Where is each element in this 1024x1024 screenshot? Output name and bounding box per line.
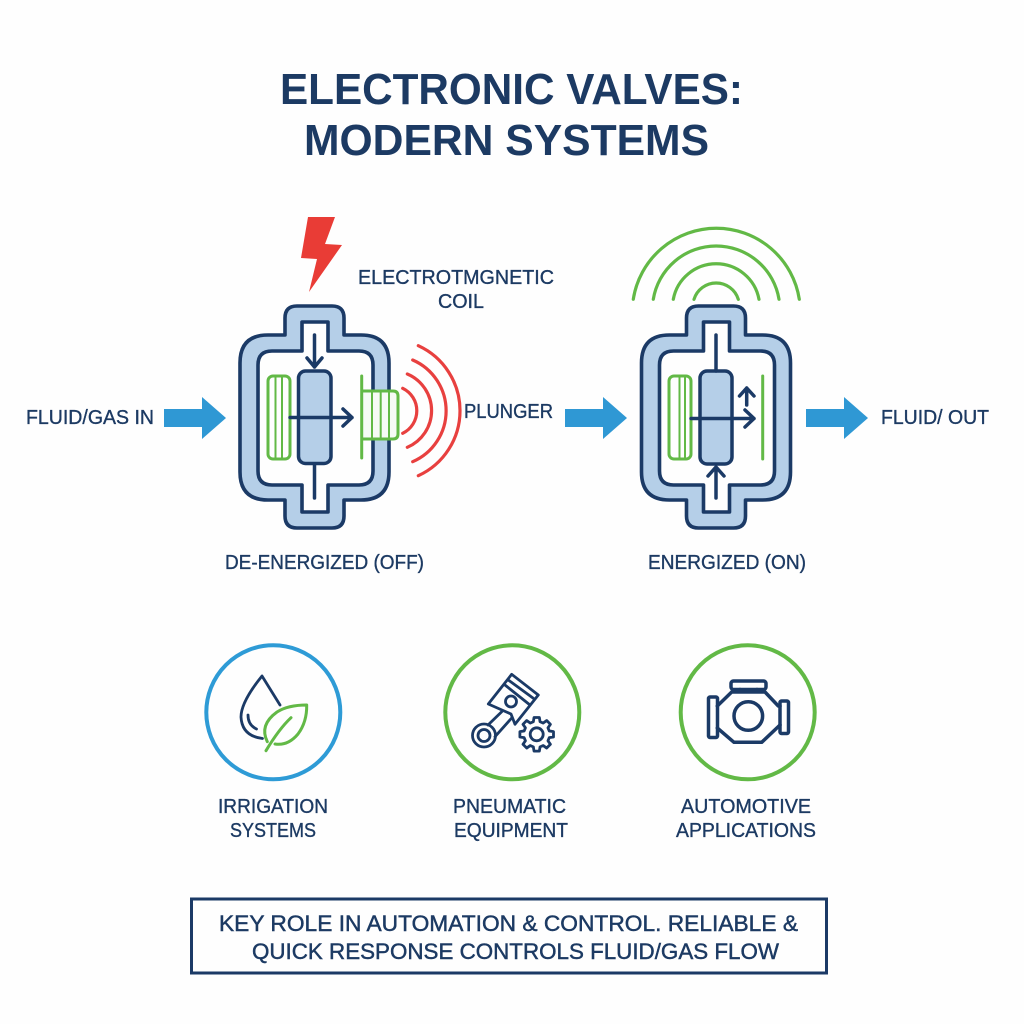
label: electromagnetic coil: ELECTROTMGNETIC bbox=[358, 267, 554, 289]
callout box bbox=[192, 899, 826, 973]
label: fluid out: FLUID/ OUT bbox=[881, 407, 989, 429]
green contact line bbox=[761, 376, 764, 459]
label: automotive applications: AUTOMOTIVE bbox=[681, 796, 811, 818]
valve: de-energized state bbox=[240, 306, 398, 528]
title: ELECTRONIC VALVES: bbox=[280, 65, 743, 114]
label: irrigation systems: SYSTEMS bbox=[230, 820, 316, 842]
label: irrigation systems: IRRIGATION bbox=[218, 796, 328, 818]
title: MODERN SYSTEMS bbox=[304, 116, 709, 165]
label: pneumatic equipment: EQUIPMENT bbox=[454, 820, 568, 842]
icon: irrigation bbox=[206, 645, 340, 779]
arrow: plunger travel bbox=[290, 409, 352, 426]
label: energized: ENERGIZED (ON) bbox=[648, 552, 806, 574]
label: irrigation systems bbox=[218, 796, 328, 842]
stem bbox=[313, 464, 316, 498]
label: de-energized: DE-ENERGIZED (OFF) bbox=[225, 552, 424, 574]
left coil bbox=[268, 376, 290, 459]
plunger bbox=[298, 371, 331, 464]
left coil bbox=[669, 376, 691, 459]
right coil bbox=[362, 376, 398, 458]
valve: energized state bbox=[642, 306, 790, 528]
arrow: inlet flow bbox=[164, 397, 226, 439]
arrow: plunger travel bbox=[691, 410, 754, 427]
icon: red lightning bolt bbox=[301, 217, 342, 292]
icon: engine bbox=[681, 645, 815, 779]
plunger bbox=[700, 371, 732, 464]
arrow: downward force bbox=[307, 335, 322, 367]
label: plunger: PLUNGER bbox=[464, 401, 553, 423]
callout box: QUICK RESPONSE CONTROLS FLUID/GAS FLOW bbox=[252, 939, 779, 964]
label: automotive applications bbox=[676, 796, 816, 842]
icon: piston and gear bbox=[445, 645, 579, 779]
arrow: outlet flow bbox=[806, 397, 868, 439]
label: fluid/gas in: FLUID/GAS IN bbox=[26, 407, 154, 429]
label: electromagnetic coil: COIL bbox=[438, 291, 484, 313]
label: automotive applications: APPLICATIONS bbox=[676, 820, 816, 842]
valve body bbox=[240, 306, 389, 528]
label: electromagnetic coil bbox=[358, 267, 554, 313]
title bbox=[280, 65, 743, 165]
arrow: upward small bbox=[740, 388, 754, 405]
stem bbox=[714, 335, 718, 371]
label: pneumatic equipment: PNEUMATIC bbox=[453, 796, 566, 818]
signal: red waves bbox=[403, 346, 460, 476]
valve body bbox=[642, 306, 790, 528]
label: pneumatic equipment bbox=[453, 796, 568, 842]
arrow: between states bbox=[565, 397, 627, 439]
arrow: upward from inlet bbox=[708, 467, 724, 498]
signal: green waves bbox=[633, 228, 799, 299]
callout box: KEY ROLE IN AUTOMATION & CONTROL. RELIABLE & bbox=[219, 911, 798, 936]
